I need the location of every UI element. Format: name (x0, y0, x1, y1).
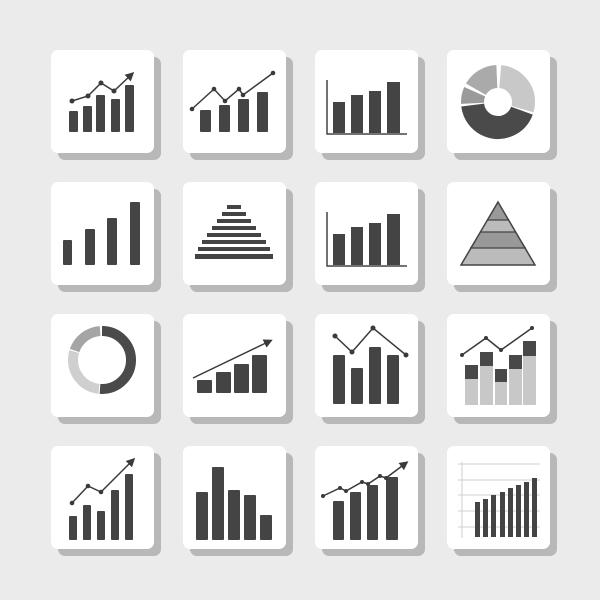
tile 15: bars with zigzag arrow (315, 446, 425, 556)
tile 14: histogram bars (183, 446, 293, 556)
tile 3: bar chart with axes (315, 50, 425, 160)
tile 7: bar chart with axes (315, 182, 425, 292)
tile 6: stepped pyramid (183, 182, 293, 292)
tile 5: rising bars (51, 182, 161, 292)
tile 8: layered pyramid (447, 182, 557, 292)
tile 2: bar chart with zigzag line (183, 50, 293, 160)
tile 4: segmented donut (447, 50, 557, 160)
tile 10: bars with rising arrow (183, 314, 293, 424)
tile 11: bars with line (315, 314, 425, 424)
tile 13: bars with arrow (51, 446, 161, 556)
tile 1: bar chart with trend arrow (51, 50, 161, 160)
tile 9: ring chart (51, 314, 161, 424)
tile 16: grid bar chart (447, 446, 557, 556)
tile 12: stacked bars with line (447, 314, 557, 424)
